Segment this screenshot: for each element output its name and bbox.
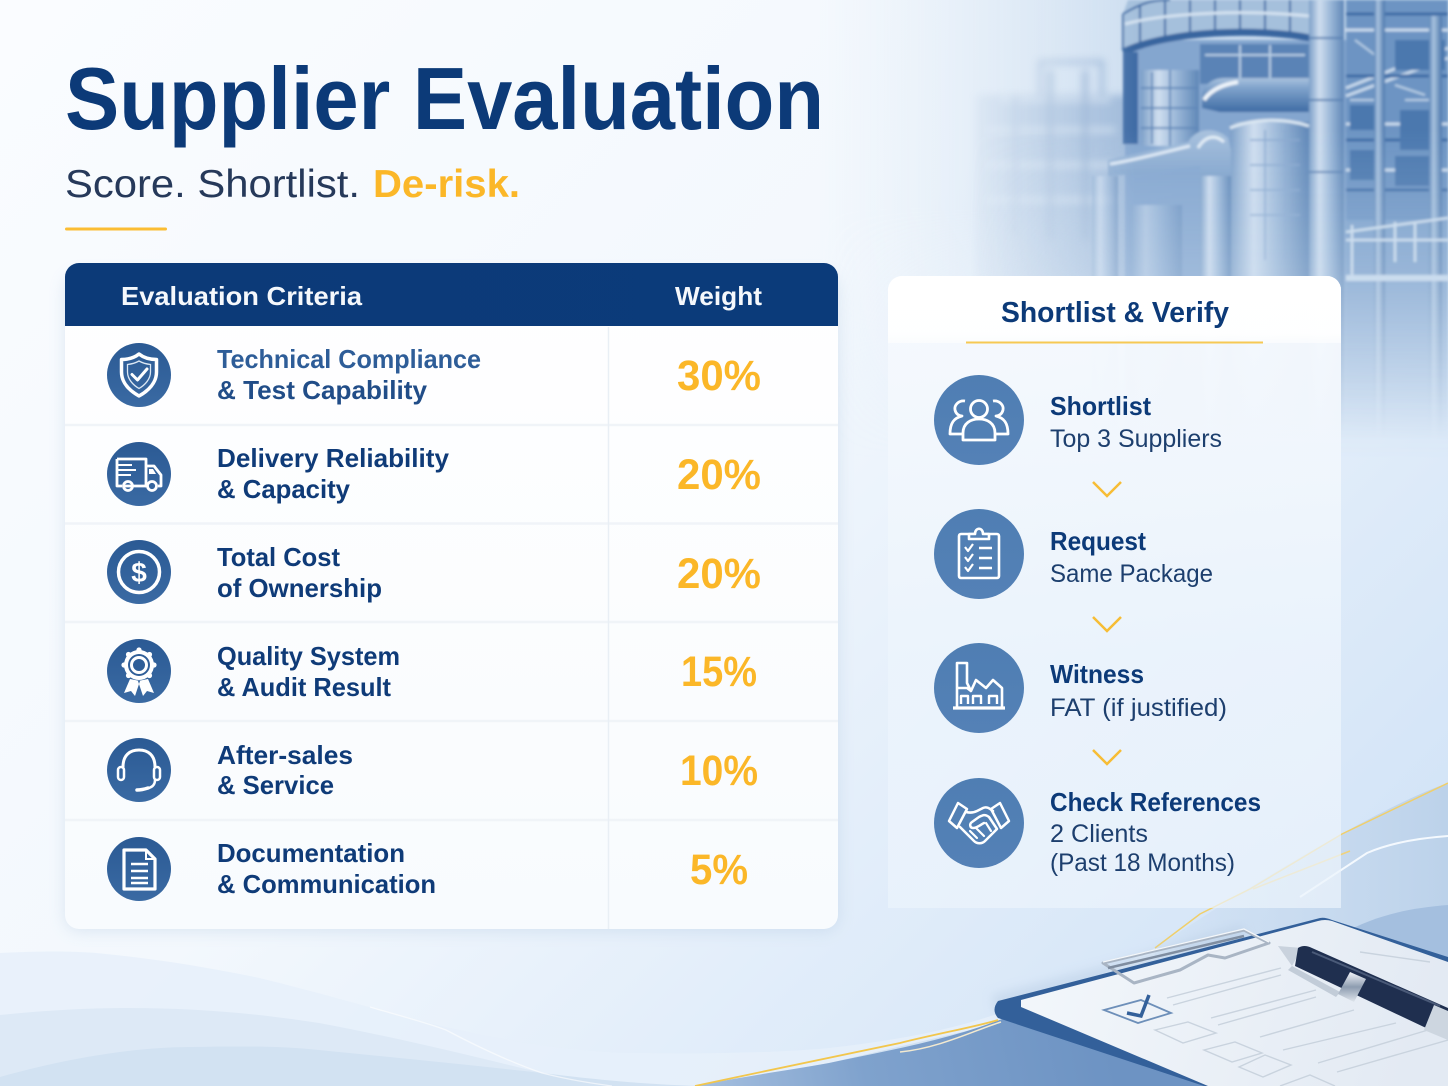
step: check references: (Past 18 Months) bbox=[1050, 849, 1235, 877]
pen bbox=[1278, 946, 1448, 1040]
label: Delivery Reliability bbox=[217, 443, 450, 473]
label: Total Cost bbox=[217, 542, 340, 572]
panel heading: Shortlist & Verify bbox=[1001, 297, 1229, 329]
weight: 15% bbox=[681, 648, 757, 696]
illustration: clipboard and pen bbox=[994, 918, 1448, 1086]
label: Witness bbox=[1050, 659, 1144, 689]
row: after-sales: & Service bbox=[217, 770, 334, 800]
distant tower bbox=[980, 56, 1126, 276]
weight: 30% bbox=[677, 352, 761, 400]
label: Request bbox=[1050, 526, 1146, 556]
step: check references bbox=[934, 778, 1261, 877]
row: documentation bbox=[107, 837, 748, 901]
main column bbox=[1308, 0, 1346, 356]
row: documentation: & Communication bbox=[217, 869, 436, 899]
weight: 10% bbox=[680, 747, 758, 795]
clipboard board bbox=[994, 918, 1448, 1086]
elbow pipe bbox=[1107, 129, 1232, 176]
step: shortlist: Top 3 Suppliers bbox=[1050, 425, 1222, 453]
upper vessel platform bbox=[1123, 0, 1310, 50]
form lines and empty boxes bbox=[1155, 952, 1448, 1086]
icon: checklist clipboard bbox=[934, 509, 1024, 599]
subtitle: De-risk. bbox=[373, 163, 520, 206]
row: delivery reliability bbox=[107, 442, 761, 506]
panel: evaluation criteria table bbox=[65, 263, 838, 931]
icon: people bbox=[934, 375, 1024, 465]
step: request bbox=[934, 509, 1213, 599]
row: technical compliance bbox=[107, 343, 761, 407]
gold accent lines bbox=[695, 783, 1448, 1086]
clip bbox=[1103, 929, 1269, 983]
table header bbox=[121, 281, 762, 311]
row: quality system bbox=[107, 639, 757, 703]
label: Check References bbox=[1050, 787, 1261, 817]
row: quality system: & Audit Result bbox=[217, 672, 391, 702]
step: shortlist bbox=[934, 375, 1222, 465]
subtitle bbox=[65, 163, 520, 206]
right structure bbox=[1346, 0, 1448, 220]
row: total cost: of Ownership bbox=[217, 573, 382, 603]
arrow: chevron 3 bbox=[1093, 750, 1121, 764]
lower verticals bbox=[1092, 176, 1119, 276]
icon: handshake bbox=[934, 778, 1024, 868]
label: Documentation bbox=[217, 838, 405, 868]
label: Technical Compliance bbox=[217, 344, 481, 374]
table header: Evaluation Criteria bbox=[121, 281, 363, 311]
panel: shortlist and verify bbox=[888, 276, 1341, 908]
row: delivery reliability: & Capacity bbox=[217, 474, 351, 504]
label: Quality System bbox=[217, 641, 400, 671]
weight: 20% bbox=[677, 550, 761, 598]
clipboard paper bbox=[1021, 920, 1448, 1086]
background: refinery image bbox=[907, 0, 1448, 431]
weight: 5% bbox=[690, 846, 748, 894]
row: total cost bbox=[107, 540, 761, 604]
icon: factory bbox=[934, 643, 1024, 733]
table header: Weight bbox=[675, 281, 762, 311]
icon: headset bbox=[107, 738, 171, 802]
horizontal pipe bbox=[1202, 78, 1310, 112]
step: check references: 2 Clients bbox=[1050, 820, 1148, 848]
icon: delivery truck bbox=[107, 442, 171, 506]
weight: 20% bbox=[677, 451, 761, 499]
label: Shortlist bbox=[1050, 391, 1151, 421]
arrow: chevron 2 bbox=[1093, 617, 1121, 631]
step: request: Same Package bbox=[1050, 560, 1213, 588]
step: witness: FAT (if justified) bbox=[1050, 694, 1227, 722]
arrow: chevron 1 bbox=[1093, 482, 1121, 496]
icon: rosette bbox=[107, 639, 171, 703]
mid vessel bbox=[1141, 70, 1199, 146]
checkbox with tick bbox=[1104, 995, 1171, 1023]
label: After-sales bbox=[217, 740, 353, 770]
row: after-sales bbox=[107, 738, 758, 802]
icon: shield bbox=[107, 343, 171, 407]
icon: dollar coin: $ bbox=[131, 557, 147, 588]
background: bottom waves bbox=[0, 783, 1448, 1086]
step: witness bbox=[934, 643, 1227, 733]
subtitle: Score. Shortlist. bbox=[65, 163, 360, 206]
icon: document bbox=[107, 837, 171, 901]
row: technical compliance: & Test Capability bbox=[217, 375, 428, 405]
icon: dollar coin bbox=[107, 540, 171, 604]
steelwork backdrop bbox=[1124, 38, 1348, 394]
lower tank bbox=[1234, 121, 1310, 276]
title: Supplier Evaluation bbox=[65, 49, 824, 148]
